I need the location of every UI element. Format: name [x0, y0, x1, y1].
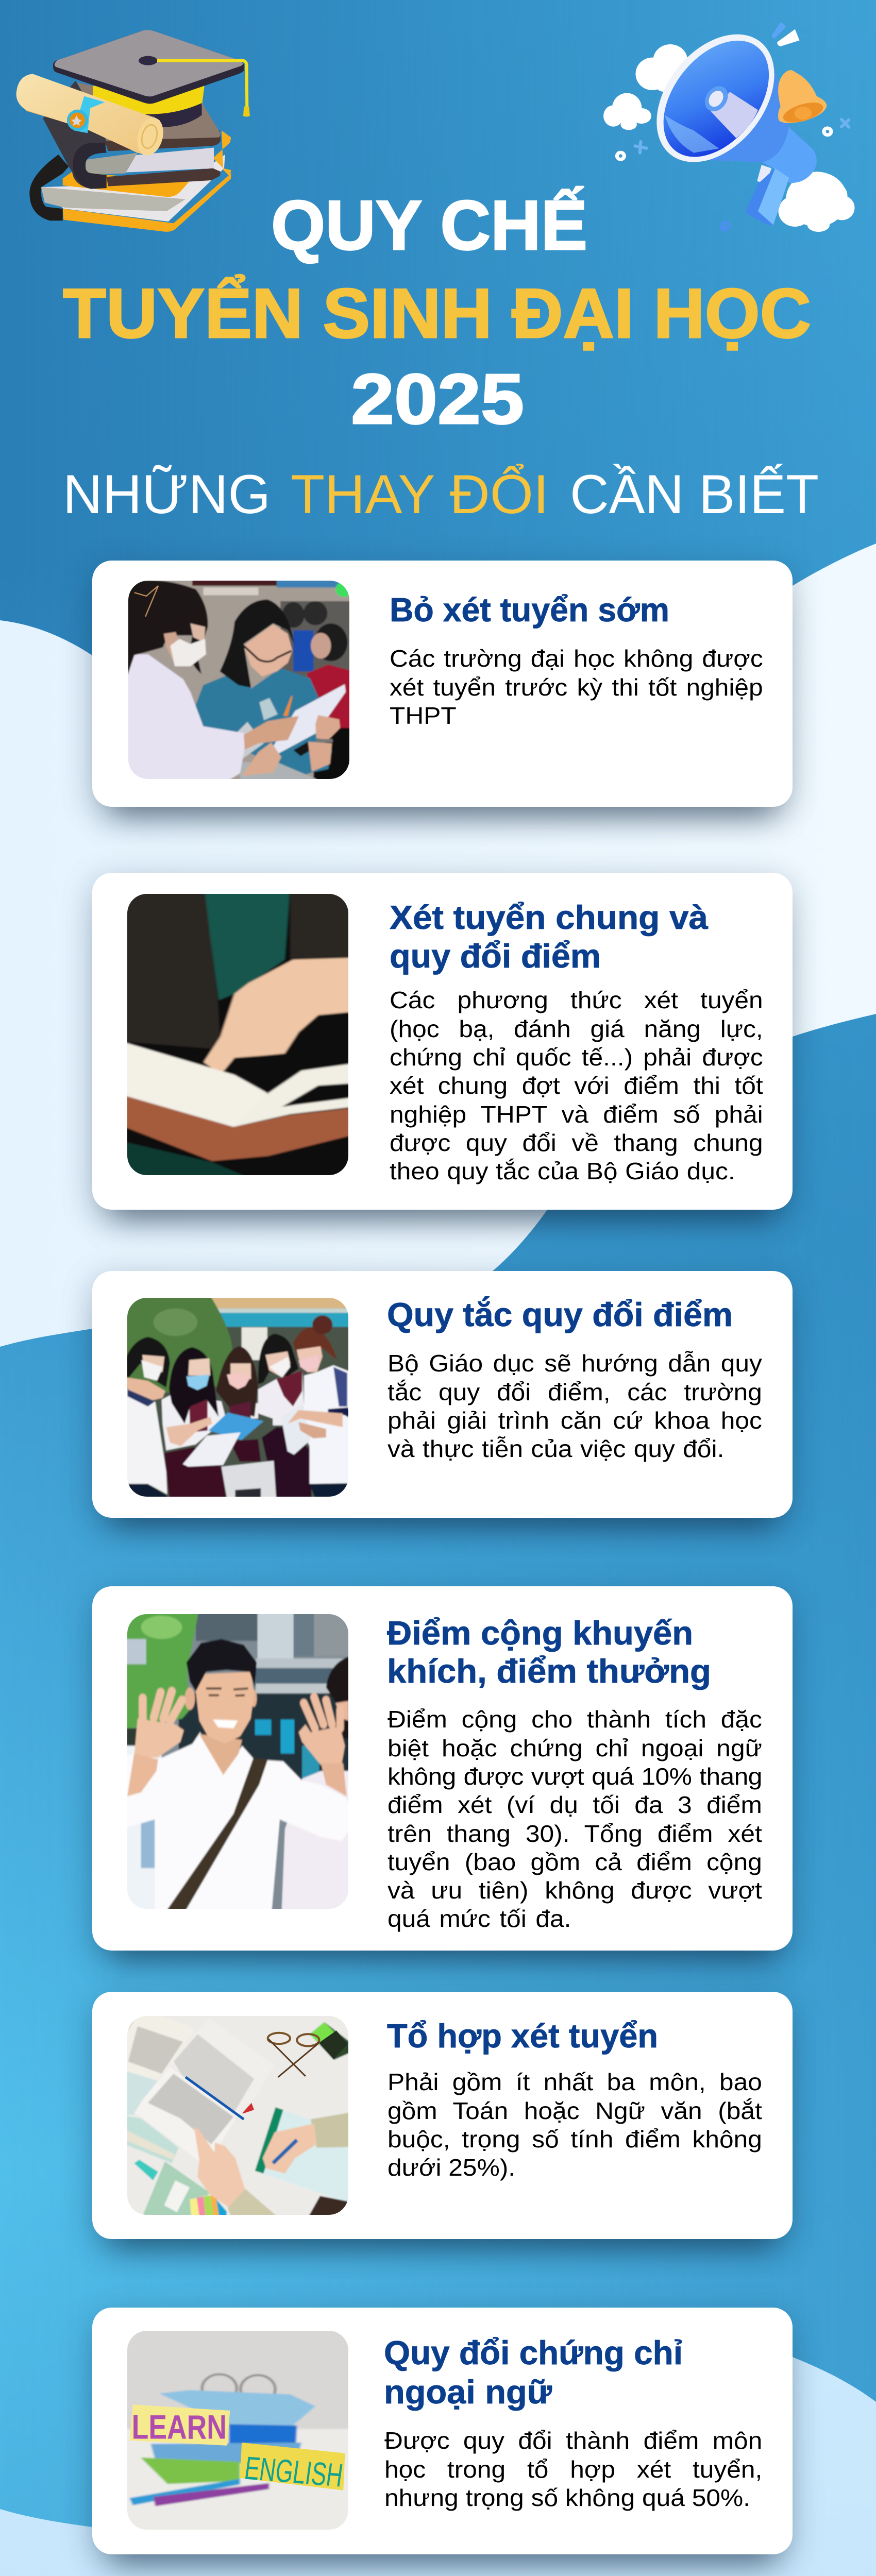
heading: [92, 1586, 793, 1951]
body text: tuyển (bao gồm cả điểm cộng: [388, 1849, 762, 1875]
heading: Điểm cộng khuyến: [387, 1614, 693, 1652]
body text: và thực tiễn của việc quy đổi.: [388, 1435, 724, 1462]
body text: không được vượt quá 10% thang: [388, 1763, 762, 1790]
icon: megaphone with bell and clouds: [603, 23, 854, 232]
panel: Điểm cộng khuyến khích, điểm thưởng: [92, 1586, 793, 1951]
body text: (học bạ, đánh giá năng lực,: [390, 1015, 763, 1042]
title line: 2025: 2025: [351, 360, 524, 439]
panel: Xét tuyển chung và quy đổi điểm: [92, 873, 793, 1210]
body text: [390, 645, 763, 729]
icon: graduation cap on books with diploma: [16, 30, 250, 232]
body text: chứng chỉ quốc tế...) phải được: [390, 1044, 763, 1071]
photo: Learn English books: [127, 2331, 348, 2530]
heading: khích, điểm thưởng: [387, 1652, 711, 1690]
body text: [388, 1705, 762, 1934]
body text: dưới 25%).: [388, 2154, 515, 2181]
photo: students reading paper: [128, 581, 349, 779]
body text: Các trường đại học không được: [390, 645, 763, 672]
heading: quy đổi điểm: [390, 937, 601, 975]
heading: Tổ hợp xét tuyển: [387, 2017, 658, 2055]
heading: Bỏ xét tuyển sớm: [390, 591, 669, 629]
heading: Quy đổi chứng chỉ: [384, 2334, 683, 2371]
photo: Learn English books: LEARN: [132, 2408, 227, 2446]
panel: Bỏ xét tuyển sớm: [92, 561, 793, 807]
subtitle words: Cần biết: CẦN BIẾT: [570, 463, 819, 525]
heading: Xét tuyển chung và: [390, 899, 709, 936]
heading: [92, 2308, 793, 2554]
body text: Phải gồm ít nhất ba môn, bao: [388, 2069, 762, 2095]
subtitle word: Những: NHỮNG: [63, 463, 271, 525]
body text: trên thang 30). Tổng điểm xét: [388, 1820, 762, 1847]
body text: xét chung đợt với điểm thi tốt: [390, 1072, 763, 1099]
panel: Tổ hợp xét tuyển: [92, 1992, 793, 2239]
panel: Quy tắc quy đổi điểm: [92, 1271, 793, 1518]
photo: smiling student waving: [127, 1614, 348, 1909]
photo: group of students: [127, 1298, 348, 1497]
body text: buộc, trọng số tính điểm không: [388, 2126, 762, 2153]
body text: Bộ Giáo dục sẽ hướng dẫn quy: [388, 1350, 762, 1377]
title line: Tuyển sinh đại học: TUYỂN SINH ĐẠI HỌC: [63, 274, 811, 352]
photo: hand on open book: [127, 894, 348, 1175]
body text: xét tuyển trước kỳ thi tốt nghiệp: [390, 674, 763, 701]
title: [63, 185, 819, 525]
body text: phải giải trình căn cứ khoa học: [388, 1407, 762, 1434]
body text: gồm Toán hoặc Ngữ văn (bắt: [388, 2097, 762, 2124]
body text: nghiệp THPT và điểm số phải: [390, 1101, 763, 1128]
heading: [390, 899, 709, 975]
subtitle words: Thay đổi: THAY ĐỔI: [291, 463, 549, 525]
body text: [388, 1350, 762, 1462]
body text: theo quy tắc của Bộ Giáo dục.: [390, 1158, 735, 1184]
body text: và ưu tiên) không được vượt: [388, 1877, 762, 1904]
heading: ngoại ngữ: [384, 2373, 552, 2411]
panel: Quy đổi chứng chỉ ngoại ngữ: [92, 2308, 793, 2554]
body text: [384, 2427, 762, 2512]
body text: Các phương thức xét tuyển: [390, 987, 763, 1013]
body text: THPT: [390, 702, 457, 729]
body text: biệt hoặc chứng chỉ ngoại ngữ: [388, 1735, 762, 1761]
body text: Được quy đổi thành điểm môn: [384, 2427, 762, 2454]
body text: Điểm cộng cho thành tích đặc: [388, 1706, 762, 1733]
photo: desk with books and notes: [127, 2016, 348, 2215]
title line: Quy chế: QUY CHẾ: [271, 186, 587, 264]
heading: Quy tắc quy đổi điểm: [387, 1296, 733, 1333]
body text: học trong tổ hợp xét tuyển,: [384, 2456, 762, 2483]
body text: nhưng trọng số không quá 50%.: [384, 2484, 750, 2511]
body text: tắc quy đổi điểm, các trường: [388, 1379, 762, 1405]
body text: quá mức tối đa.: [388, 1905, 571, 1932]
body text: điểm xét (ví dụ tối đa 3 điểm: [388, 1791, 762, 1818]
body text: [388, 2068, 762, 2182]
body text: được quy đổi về thang chung: [390, 1129, 763, 1156]
body text: [390, 987, 763, 1184]
